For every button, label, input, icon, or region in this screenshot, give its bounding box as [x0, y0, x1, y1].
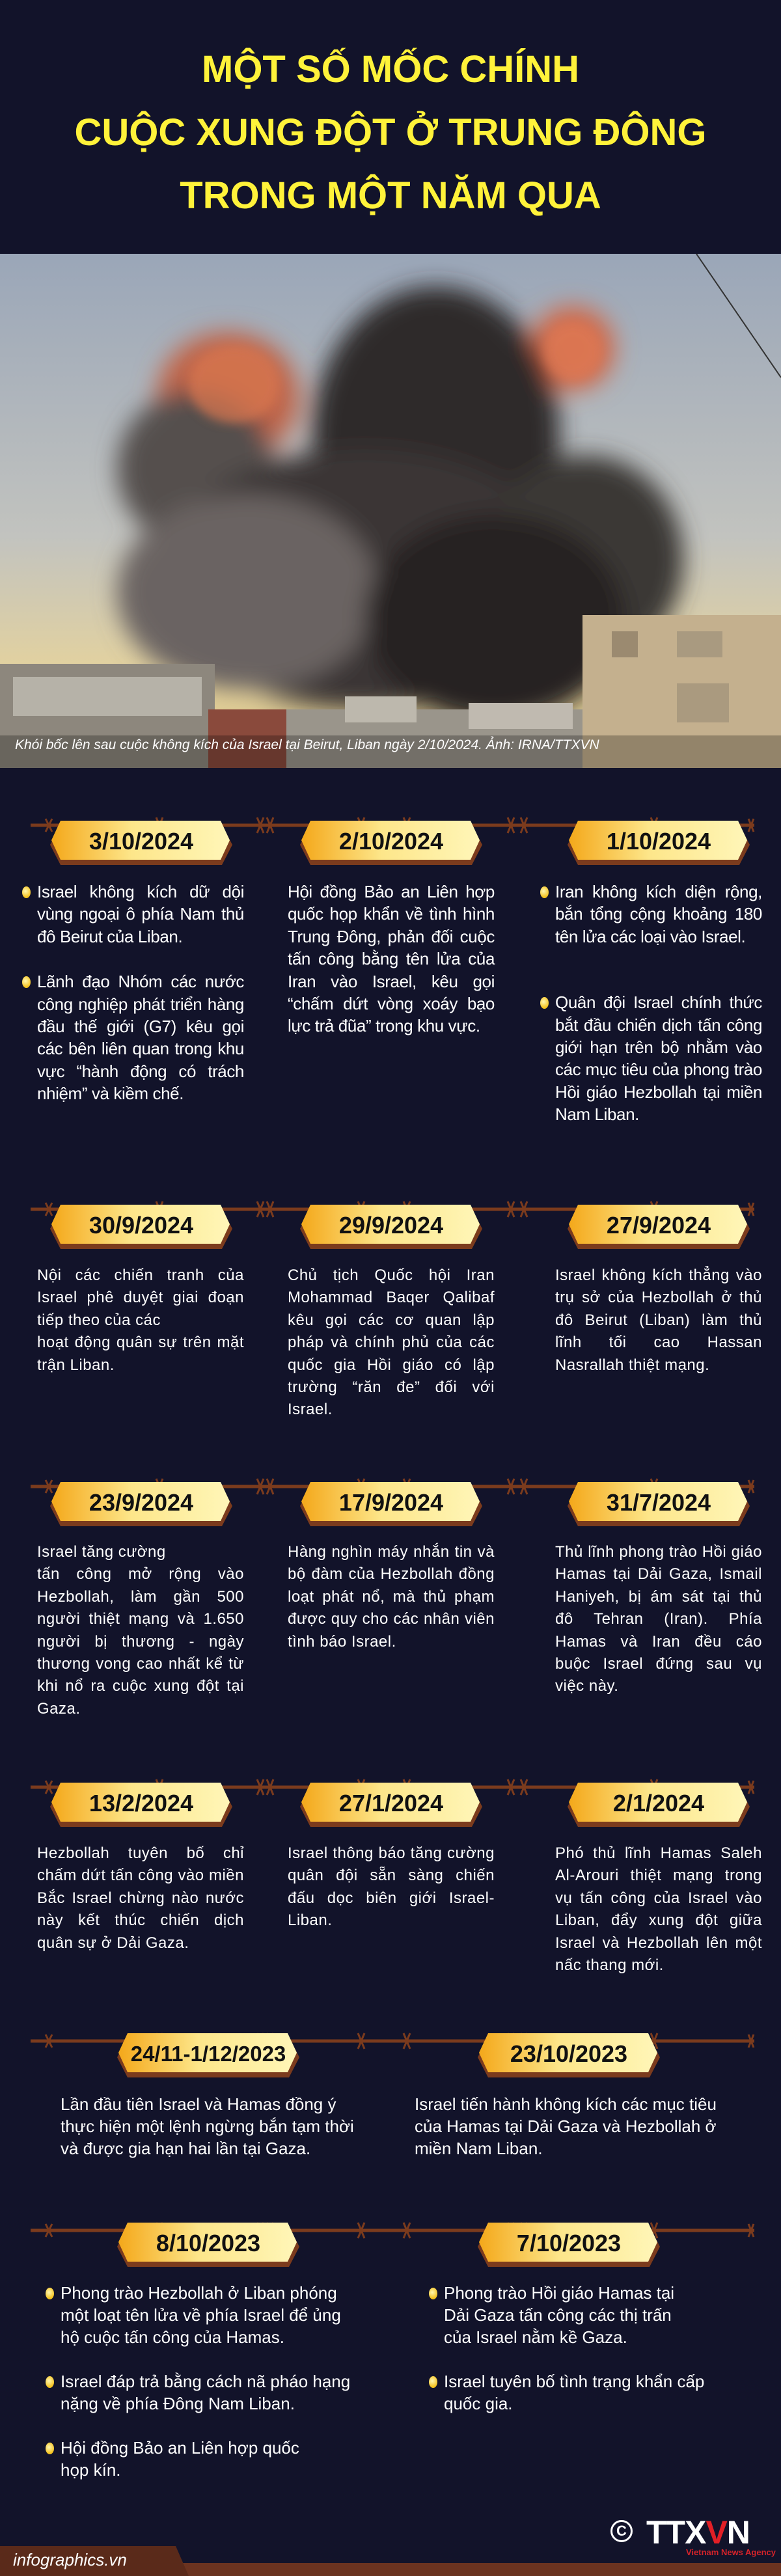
photo caption: Khói bốc lên sau cuộc không kích của Israel tại Beirut, Liban ngày 2/10/2024. Ảnh: IRNA/TTXVN — [15, 737, 599, 752]
row 5 — [61, 2033, 717, 2158]
text 29/9: Chủ tịch Quốc hội Iran Mohammad Baqer Qalibaf kêu gọi các cơ quan lập pháp và chính phủ của các quốc gia Hồi giáo có lập trường “răn đe” đối với Israel. — [288, 1267, 495, 1418]
ribbon 23/10/2023: 23/10/2023 — [510, 2040, 627, 2067]
ribbon 23/9/2024: 23/9/2024 — [89, 1489, 193, 1516]
footer — [0, 2563, 781, 2576]
text 2/1: Phó thủ lĩnh Hamas Saleh Al-Arouri thiệt mạng trong vụ tấn công của Israel vào Liban, đẩy xung đột giữa Israel và Hezbollah lên một nấc thang mới. — [555, 1844, 762, 1974]
text 7/10: Phong trào Hồi giáo Hamas tại — [444, 2283, 674, 2303]
footer: infographics.vn: infographics.vn — [13, 2550, 127, 2569]
ribbon 8/10/2023: 8/10/2023 — [156, 2230, 260, 2256]
text 23/9: tấn công mở rộng vào Hezbollah, làm gần 500 người thiệt mạng và 1.650 người bị thương - ngày thương vong cao nhất kể từ khi nổ ra cuộc xung đột tại Gaza. — [37, 1565, 244, 1718]
ribbon 23/9/2024 — [50, 1482, 232, 1526]
text 27/1: Israel thông báo tăng cường quân đội sẵn sàng chiến đấu dọc biên giới Israel-Liban. — [288, 1844, 495, 1929]
row 4 — [37, 1783, 762, 1974]
text 27/9: Israel không kích thẳng vào trụ sở của Hezbollah ở thủ đô Beirut (Liban) làm thủ lĩnh tối cao Hassan Nasrallah thiệt mạng. — [555, 1267, 762, 1374]
text 30/9 — [37, 1267, 244, 1374]
ribbon 17/9/2024: 17/9/2024 — [339, 1489, 443, 1516]
ribbon 3/10/2024: 3/10/2024 — [89, 828, 193, 855]
text 13/2: Hezbollah tuyên bố chỉ chấm dứt tấn công vào miền Bắc Israel chừng nào nước này kết thúc chiến dịch quân sự ở Dải Gaza. — [37, 1844, 244, 1952]
ribbon 27/1/2024: 27/1/2024 — [339, 1790, 443, 1816]
ribbon 23/10/2023 — [478, 2033, 660, 2077]
photo: smoke over Beirut — [0, 254, 781, 768]
ribbon 2/1/2024 — [568, 1783, 750, 1827]
row 6 — [46, 2223, 704, 2480]
text 23/10: Israel tiến hành không kích các mục tiêu của Hamas tại Dải Gaza và Hezbollah ở miền Nam Liban. — [415, 2094, 717, 2158]
ribbon 7/10/2023: 7/10/2023 — [517, 2230, 621, 2256]
ribbon 7/10/2023 — [478, 2223, 660, 2267]
ribbon 1/10/2024: 1/10/2024 — [607, 828, 711, 855]
text 2/10/2024: Hội đồng Bảo an Liên hợp quốc họp khẩn về tình hình Trung Đông, phản đối cuộc tấn công bằng tên lửa của Iran vào Israel, kêu gọi “chấm dứt vòng xoáy bạo lực trả đũa” trong khu vực. — [288, 882, 495, 1035]
text 31/7: Thủ lĩnh phong trào Hồi giáo Hamas tại Dải Gaza, Ismail Haniyeh, bị ám sát tại thủ đô Tehran (Iran). Phía Hamas và Iran đều cáo buộc Israel đứng sau vụ việc này. — [555, 1543, 762, 1695]
text 8/10: Hội đồng Bảo an Liên hợp quốc — [61, 2438, 299, 2458]
text 8/10: Phong trào Hezbollah ở Liban phóng một loạt tên lửa về phía Israel để ủng hộ cuộc tấn công của Hamas. — [61, 2283, 341, 2347]
logo: TTXVN — [610, 2514, 776, 2557]
logo: TTXVN: TTXVN — [646, 2514, 750, 2551]
text 3/10/2024: Lãnh đạo Nhóm các nước công nghiệp phát triển hàng đầu thế giới (G7) kêu gọi các bên liên quan trong khu vực “hành động có trách nhiệm” và kiềm chế. — [37, 972, 244, 1103]
ribbon 3/10/2024 — [50, 821, 232, 865]
ribbon 13/2/2024 — [50, 1783, 232, 1827]
text 3/10/2024: Israel không kích dữ dội vùng ngoại ô phía Nam thủ đô Beirut của Liban. — [37, 882, 244, 946]
ribbon 17/9/2024 — [300, 1482, 482, 1526]
text 3/10/2024 — [22, 882, 244, 1103]
ribbon 30/9/2024: 30/9/2024 — [89, 1212, 193, 1239]
title: MỘT SỐ MỐC CHÍNH — [202, 48, 579, 90]
text 23/9: Israel tăng cường — [37, 1543, 166, 1561]
ribbon 8/10/2023 — [117, 2223, 299, 2267]
text 8/10: họp kín. — [61, 2460, 121, 2480]
logo: TTXVN: C — [616, 2523, 627, 2539]
text 7/10: của Israel nằm kề Gaza. — [444, 2327, 627, 2347]
text 30/9: Nội các chiến tranh của Israel phê duyệt giai đoạn tiếp theo của các — [37, 1267, 244, 1329]
text 7/10 — [429, 2283, 704, 2413]
ribbon 24/11-1/12/2023: 24/11-1/12/2023 — [131, 2042, 286, 2066]
logo: TTXVN: Vietnam News Agency — [686, 2547, 776, 2557]
ribbon 2/10/2024: 2/10/2024 — [339, 828, 443, 855]
text 30/9: hoạt động quân sự trên mặt trận Liban. — [37, 1334, 244, 1374]
ribbon 13/2/2024: 13/2/2024 — [89, 1790, 193, 1816]
text 1/10/2024: Quân đội Israel chính thức bắt đầu chiến dịch tấn công giới hạn trên bộ nhằm vào các mục tiêu của phong trào Hồi giáo Hezbollah tại miền Nam Liban. — [555, 993, 762, 1124]
ribbon 2/1/2024: 2/1/2024 — [613, 1790, 704, 1816]
ribbon 31/7/2024 — [568, 1482, 750, 1526]
text 7/10: Israel tuyên bố tình trạng khẩn cấp quốc gia. — [444, 2372, 704, 2413]
ribbon 2/10/2024 — [300, 821, 482, 865]
title: CUỘC XUNG ĐỘT Ở TRUNG ĐÔNG — [74, 111, 707, 154]
ribbon 30/9/2024 — [50, 1205, 232, 1249]
ribbon 31/7/2024: 31/7/2024 — [607, 1489, 711, 1516]
ribbon 27/1/2024 — [300, 1783, 482, 1827]
text 1/10/2024: Iran không kích diện rộng, bắn tổng cộng khoảng 180 tên lửa các loại vào Israel. — [555, 882, 762, 946]
text 8/10: Israel đáp trả bằng cách nã pháo hạng nặng về phía Đông Nam Liban. — [61, 2372, 350, 2413]
row 1 — [22, 821, 762, 1124]
ribbon 29/9/2024 — [300, 1205, 482, 1249]
ribbon 24/11-1/12/2023 — [117, 2033, 299, 2077]
row 3 — [37, 1482, 762, 1718]
row 2 — [37, 1205, 762, 1418]
ribbon 1/10/2024 — [568, 821, 750, 865]
ribbon 29/9/2024: 29/9/2024 — [339, 1212, 443, 1239]
text 1/10/2024 — [540, 882, 762, 1124]
title: TRONG MỘT NĂM QUA — [180, 174, 601, 217]
title — [74, 48, 707, 217]
text 17/9: Hàng nghìn máy nhắn tin và bộ đàm của Hezbollah đồng loạt phát nổ, mà thủ phạm được quy cho các nhân viên tình báo Israel. — [288, 1543, 495, 1651]
ribbon 27/9/2024 — [568, 1205, 750, 1249]
text 24/11: Lần đầu tiên Israel và Hamas đồng ý thực hiện một lệnh ngừng bắn tạm thời và được gia hạn hai lần tại Gaza. — [61, 2094, 354, 2158]
ribbon 27/9/2024: 27/9/2024 — [607, 1212, 711, 1239]
text 7/10: Dải Gaza tấn công các thị trấn — [444, 2305, 672, 2325]
text 8/10 — [46, 2283, 350, 2480]
footer: infographics.vn — [0, 2546, 189, 2576]
